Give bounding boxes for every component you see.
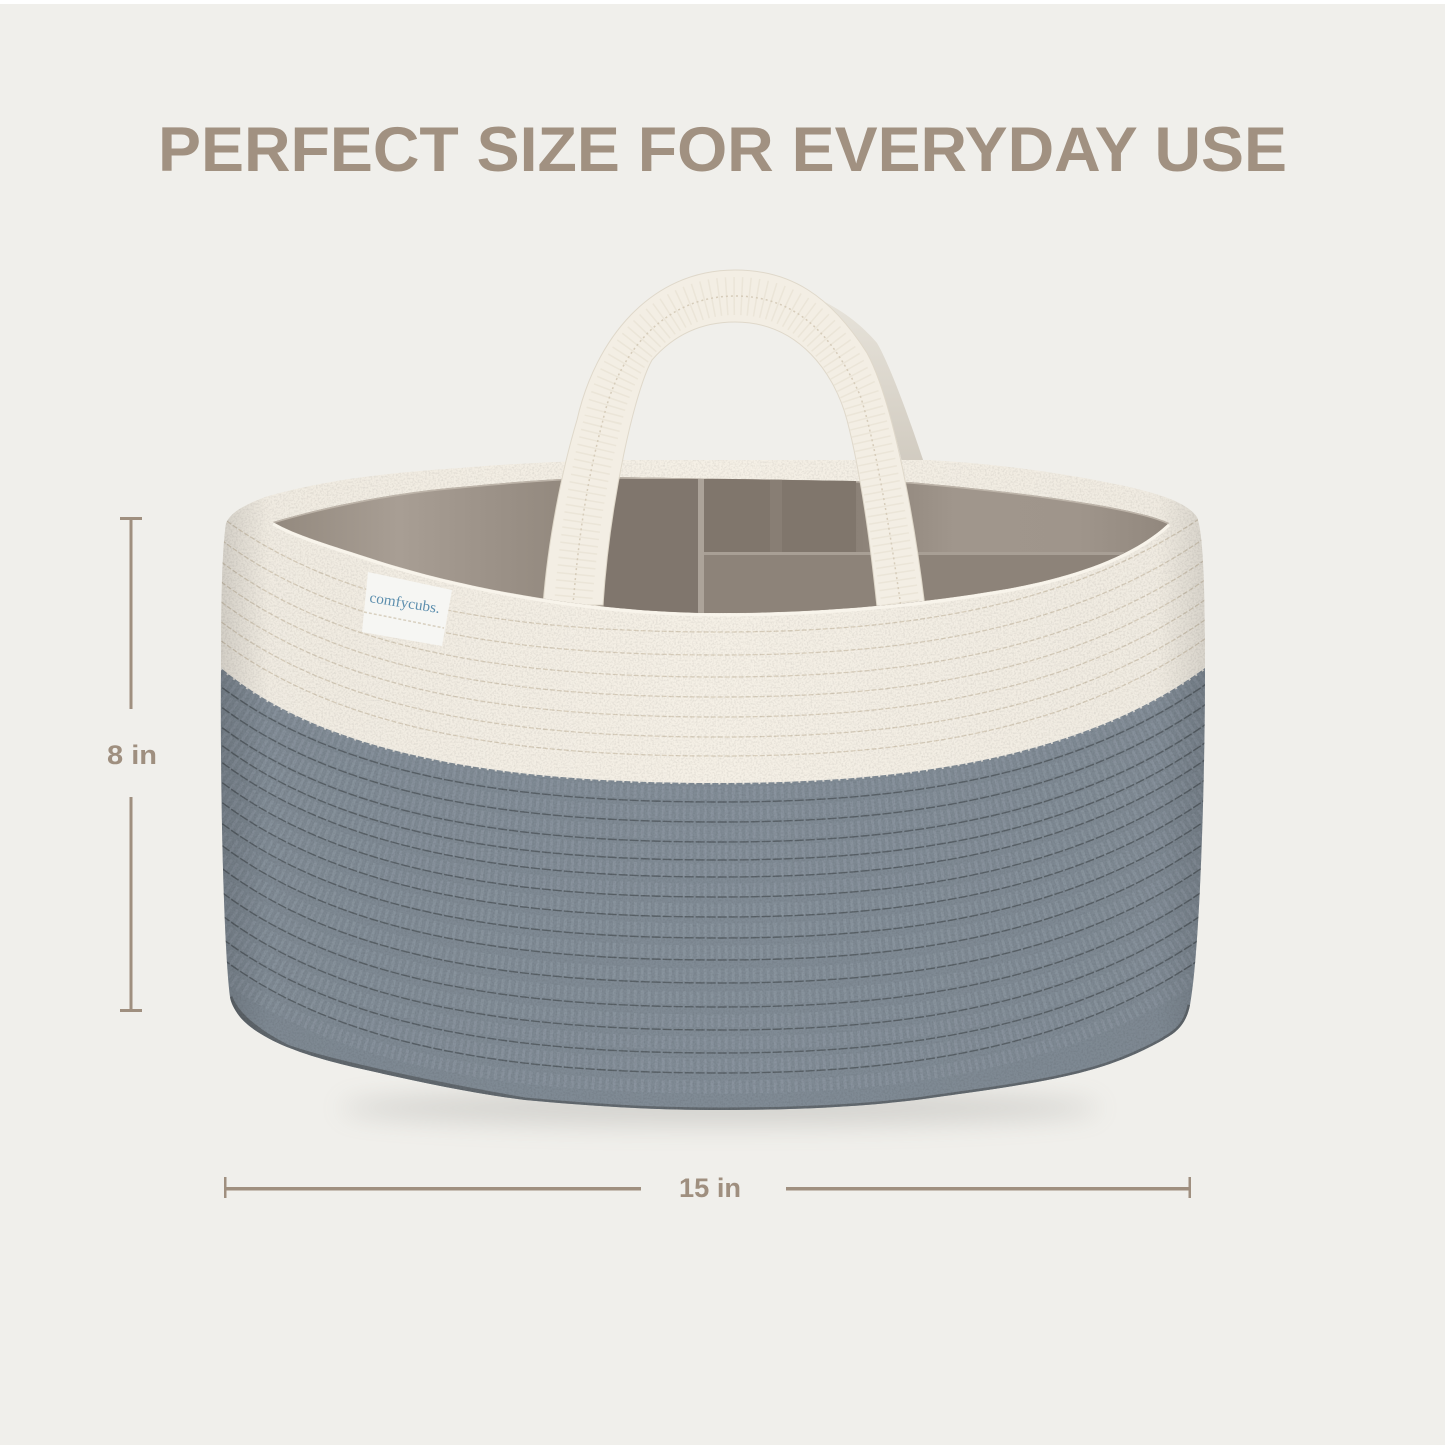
- width label: 15 in: [679, 1173, 741, 1203]
- back right compartment: [704, 479, 856, 554]
- knit texture overlay: [215, 455, 1210, 1115]
- base underside band: [230, 997, 1190, 1110]
- lining back wall: [273, 477, 1169, 613]
- grey rope row lines: [205, 674, 1220, 1073]
- lower line: [130, 797, 132, 1010]
- height dimension: 8 in: [107, 517, 157, 1012]
- right cap: [1188, 1177, 1191, 1198]
- grey rope section: [200, 455, 1230, 1140]
- stitched colour boundary: [221, 668, 1205, 783]
- top white strip: [0, 0, 1445, 4]
- left cap: [224, 1177, 226, 1198]
- compartment strap: [772, 480, 782, 481]
- label stitch: [364, 612, 444, 628]
- basket product illustration: [200, 270, 1230, 1140]
- top cap: [120, 517, 142, 520]
- back handle strap: [825, 302, 929, 480]
- front compartment panel: [704, 555, 1120, 613]
- cream rope rows: [205, 504, 1220, 756]
- grey rope braid: [205, 665, 1220, 1087]
- bottom cap: [120, 1009, 142, 1012]
- upper line: [130, 518, 132, 709]
- height label: 8 in: [107, 740, 157, 770]
- inner lining: [273, 477, 1169, 613]
- width dimension: 15 in: [224, 1173, 1191, 1203]
- right line: [786, 1187, 1190, 1190]
- brand label: [362, 572, 452, 646]
- handle braid: [573, 296, 901, 607]
- handle seam: [573, 296, 901, 607]
- vertical divider: [698, 479, 704, 619]
- label tag: [362, 572, 452, 646]
- lining top hem: [273, 477, 1169, 523]
- basket body cream section: [221, 460, 1205, 1110]
- label brand name: comfycubs.: [368, 590, 441, 617]
- horizontal divider edge: [704, 552, 1124, 555]
- left line: [224, 1187, 641, 1190]
- edge shading: [220, 497, 1205, 1028]
- title: PERFECT SIZE FOR EVERYDAY USE: [158, 115, 1287, 185]
- dark left compartment: [604, 479, 698, 619]
- front handle: [543, 270, 925, 607]
- floor shadow: [340, 1091, 1100, 1125]
- front rim highlight: [273, 524, 1169, 615]
